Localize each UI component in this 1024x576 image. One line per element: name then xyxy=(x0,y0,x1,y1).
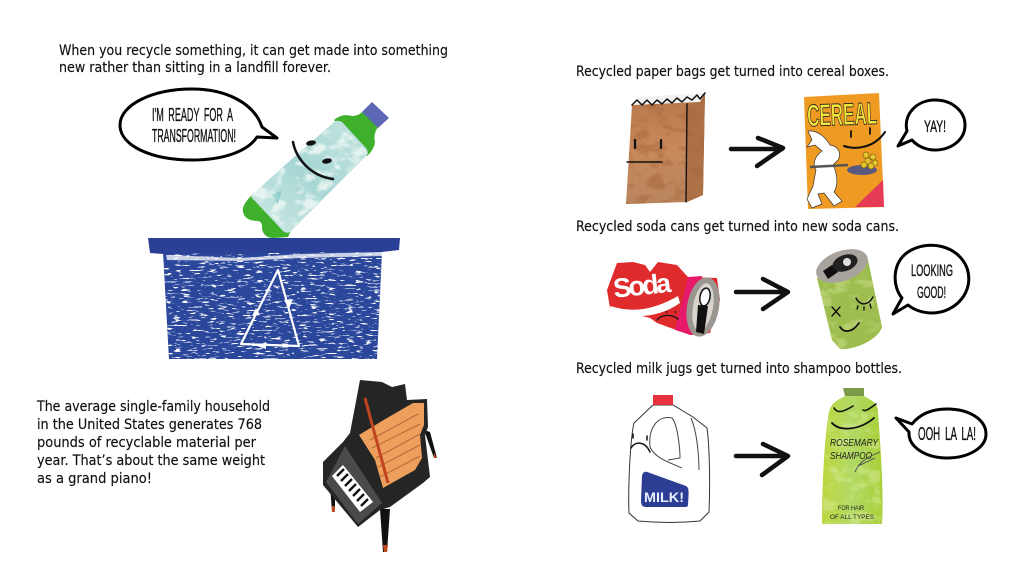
bin body xyxy=(163,252,382,359)
icon: cereal box: CEREAL xyxy=(806,96,878,133)
caption: Recycled paper bags get turned into cereal boxes. xyxy=(576,64,889,80)
recycling bin xyxy=(148,238,400,359)
panel: soda can to new soda can xyxy=(576,219,969,349)
intro text: new rather than sitting in a landfill forever. xyxy=(59,60,331,76)
speech bubble: looking good: GOOD! xyxy=(917,283,946,302)
icon: shampoo bottle: OF ALL TYPES xyxy=(830,514,875,521)
icon: shampoo bottle xyxy=(822,388,883,524)
fact text: household recyclables: year. That’s about the same weight xyxy=(37,453,265,469)
fact text: household recyclables xyxy=(36,399,270,487)
panel: paper bag to cereal box xyxy=(576,64,965,209)
icon: shampoo bottle: FOR HAIR xyxy=(838,505,864,512)
fact text: household recyclables: as a grand piano! xyxy=(37,471,152,487)
icon: milk jug xyxy=(629,395,710,522)
panel: milk jug to shampoo bottle xyxy=(576,361,986,524)
speech bubble: looking good: LOOKING xyxy=(911,261,953,280)
speech bubble: looking good xyxy=(893,245,969,314)
arrow xyxy=(736,279,788,309)
icon: grand piano xyxy=(323,380,437,552)
fact text: household recyclables: in the United States generates 768 xyxy=(37,417,262,433)
icon: cereal box xyxy=(804,93,885,209)
speech bubble: ooh la la: OOH LA LA! xyxy=(918,424,976,444)
rabbit xyxy=(807,131,878,208)
speech bubble: yay xyxy=(898,100,965,150)
icon: shampoo bottle: ROSEMARY xyxy=(830,438,879,449)
speech bubble: transformation xyxy=(120,89,277,160)
icon: paper bag xyxy=(626,93,705,204)
recycling triangle xyxy=(241,270,299,346)
icon: milk jug: MILK! xyxy=(644,489,684,505)
intro text: When you recycle something, it can get made into something xyxy=(59,43,448,59)
icon: green can xyxy=(811,243,882,349)
arrow xyxy=(736,444,788,475)
icon: crushed soda can xyxy=(607,262,724,339)
speech bubble: ooh la la xyxy=(896,409,986,458)
caption: Recycled soda cans get turned into new soda cans. xyxy=(576,219,899,235)
fact text: household recyclables: The average single-family household xyxy=(36,399,270,415)
icon: plastic bottle xyxy=(243,102,389,238)
fact text: household recyclables: pounds of recyclable material per xyxy=(37,435,256,451)
bin rim xyxy=(148,238,400,254)
icon: crushed soda can: Soda xyxy=(612,268,673,304)
speech bubble: transformation: TRANSFORMATION! xyxy=(152,126,236,146)
caption: Recycled milk jugs get turned into shampoo bottles. xyxy=(576,361,902,377)
intro text xyxy=(59,43,448,76)
speech bubble: yay: YAY! xyxy=(924,117,946,136)
speech bubble: transformation: I'M READY FOR A xyxy=(152,105,233,125)
arrow xyxy=(731,138,783,166)
icon: shampoo bottle: SHAMPOO xyxy=(830,451,872,462)
